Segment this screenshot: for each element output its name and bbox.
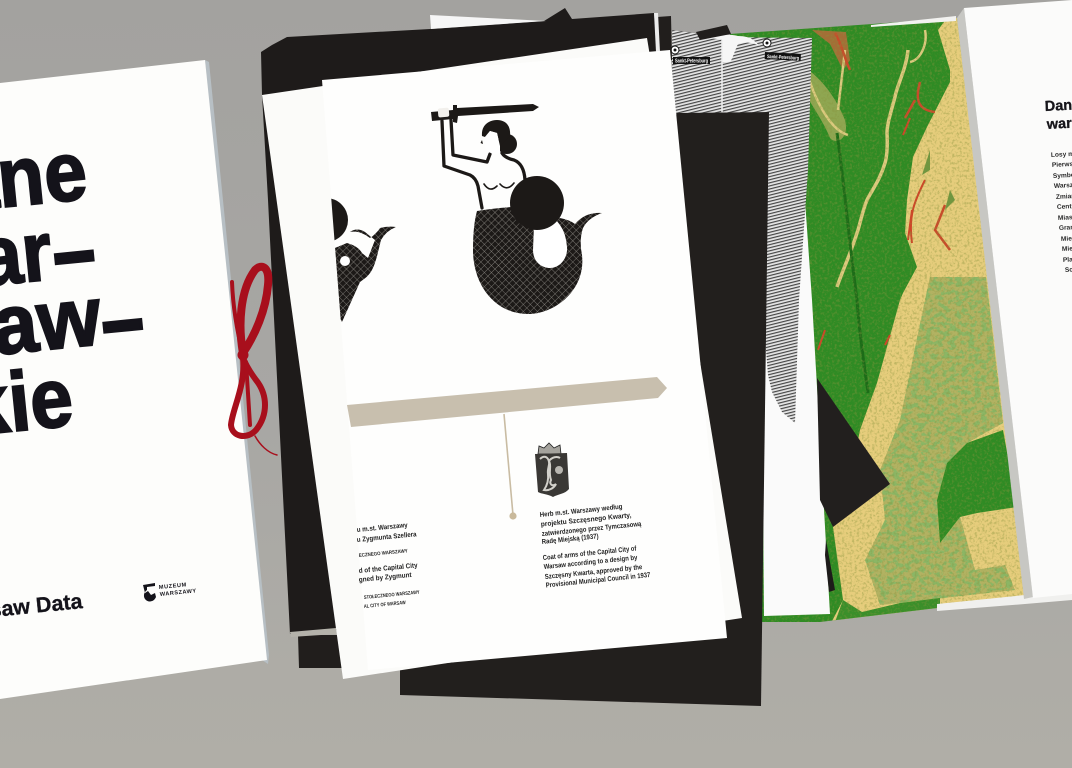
panel: large black sheet	[400, 112, 769, 706]
label: Sankt-Petersburg left: Sankt-Petersburg	[675, 58, 708, 64]
label: Sankt-Petersburg left	[673, 57, 710, 64]
line: timeline connector	[504, 414, 517, 520]
text block: right caption: Provisional Municipal Council in 1937	[545, 572, 651, 589]
text block: left caption fragment: u m.st. Warszawy	[357, 522, 408, 534]
icon: crowned coat of arms	[535, 443, 569, 497]
logo: Muzeum Warszawy: WARSZAWY	[160, 588, 197, 598]
panel: small black and white corner	[825, 540, 835, 592]
panel: white sliver below marble	[937, 590, 1072, 611]
panel: white sheet under hatched map	[762, 200, 830, 616]
label: Sankt-Petersburg right	[765, 52, 801, 62]
text block: right caption	[539, 504, 651, 589]
text block: left caption fragment: gned by Zygmunt	[359, 572, 413, 584]
logo: Muzeum Warszawy: MUZEUM	[159, 582, 187, 591]
text block: left caption fragment	[357, 522, 420, 610]
mermaid shield	[510, 176, 564, 230]
text block: left caption fragment: u Zygmunta Szellera	[357, 531, 417, 544]
label: Sankt-Petersburg right: Sankt-Petersburg	[767, 54, 799, 62]
illustration: mermaid with sword and shield	[431, 104, 602, 314]
panel: left white cover	[0, 60, 269, 699]
text block: right caption: Coat of arms of the Capital City of	[542, 545, 637, 562]
title: Dane Warszawskie: -	[94, 269, 151, 368]
text block: left caption fragment: STOŁECZNEGO WARSZAWY	[364, 590, 420, 601]
panel: black sheets stack behind	[261, 8, 731, 668]
text block: right caption: Radę Miejską (1937)	[541, 533, 599, 546]
title: Dane Warszawskie	[0, 124, 151, 459]
bar: beige timeline arrow	[347, 377, 667, 427]
text block: left caption fragment: d of the Capital City	[359, 562, 418, 575]
panel: hatched map sheets	[671, 30, 812, 423]
heading: Dane warszawskie	[1044, 97, 1072, 133]
panel: back white sheet	[262, 38, 742, 679]
text block: right caption: zatwierdzonego przez Tymczasową	[541, 521, 642, 538]
panel: white sliver sheet at top	[430, 15, 546, 29]
title: Dane Warszawskie: -	[45, 201, 102, 299]
mermaid body outline	[442, 120, 525, 208]
panel: right white folder page	[964, 0, 1072, 598]
panel: black triangle sheet	[817, 378, 890, 527]
icon: map marker Sankt-Petersburg right	[763, 39, 771, 47]
text block: left caption fragment: AL CITY OF WARSAW	[364, 600, 406, 610]
icon: red ribbon bow	[231, 267, 277, 455]
panel: marbled paper inside folder	[730, 10, 1030, 628]
panel: white sliver behind marble top	[871, 16, 956, 27]
panel: grey folder spine	[957, 8, 1033, 599]
text block: right page contents list	[1051, 150, 1072, 274]
mermaid tail	[473, 207, 602, 314]
text block: right caption: Herb m.st. Warszawy według	[539, 504, 623, 519]
panel: front white sheet	[322, 50, 727, 670]
mermaid head and hair	[480, 120, 517, 154]
text block: left caption fragment: ECZNEGO WARSZAWY	[359, 548, 409, 559]
illustration: second mermaid fragment	[331, 198, 396, 322]
icon: map marker Sankt-Petersburg left	[671, 46, 679, 54]
icon: sword	[431, 104, 539, 123]
text block: right caption: Szczęsny Kwarta, approved by the	[544, 564, 643, 581]
text block: right caption: Warsaw according to a design by	[543, 555, 638, 571]
text block: right caption: projektu Szczęsnego Kwarty,	[540, 512, 632, 528]
logo: Muzeum Warszawy	[143, 582, 197, 601]
